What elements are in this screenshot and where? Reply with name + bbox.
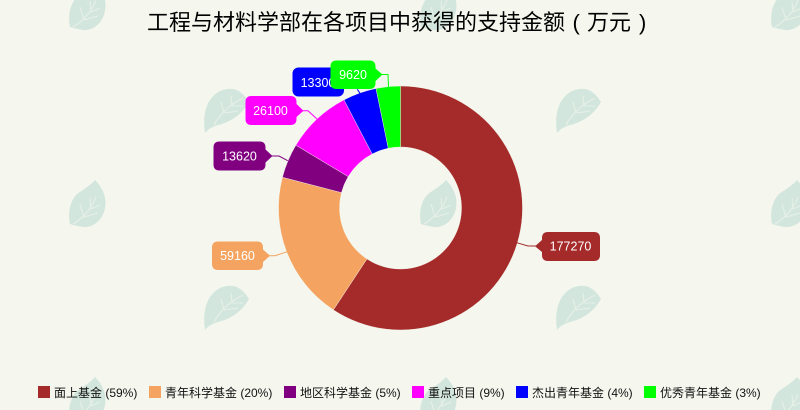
legend item: 面上基金: 面上基金 (59%) [54, 385, 137, 400]
legend [38, 385, 761, 400]
donut chart [278, 86, 522, 330]
callout: 9620: 9620 [339, 68, 367, 82]
title: 万元 [587, 10, 631, 35]
callout: 13300: 13300 [301, 76, 335, 90]
legend item: 重点项目: 重点项目 (9%) [428, 386, 505, 400]
callout: 177270 [517, 232, 600, 261]
callout: 177270: 177270 [550, 240, 591, 254]
callout: 13620 [214, 142, 288, 170]
legend item: 优秀青年基金: 优秀青年基金 (3%) [660, 385, 761, 400]
callout: 59160: 59160 [220, 249, 255, 263]
legend item: 青年科学基金: 青年科学基金 (20%) [165, 385, 272, 400]
callout: 26100 [246, 96, 317, 125]
slice: 青年科学基金 [278, 177, 367, 310]
callout: 9620 [330, 60, 388, 89]
callout: 59160 [212, 242, 287, 270]
legend item: 杰出青年基金: 杰出青年基金 (4%) [532, 385, 633, 400]
callout: 26100: 26100 [253, 104, 288, 118]
slice: 地区科学基金 [282, 145, 348, 193]
slice: 面上基金 [333, 86, 522, 330]
callout: 13300 [292, 68, 360, 96]
slice: 优秀青年基金 [376, 86, 400, 148]
title: ) [639, 10, 646, 35]
slice: 重点项目 [296, 100, 372, 177]
title: ( [572, 10, 580, 35]
title: 工程与材料学部在各项目中获得的支持金额 [147, 10, 565, 35]
legend item: 地区科学基金: 地区科学基金 (5%) [300, 385, 401, 400]
callout: 13620: 13620 [222, 150, 257, 164]
slice: 杰出青年基金 [344, 88, 388, 154]
